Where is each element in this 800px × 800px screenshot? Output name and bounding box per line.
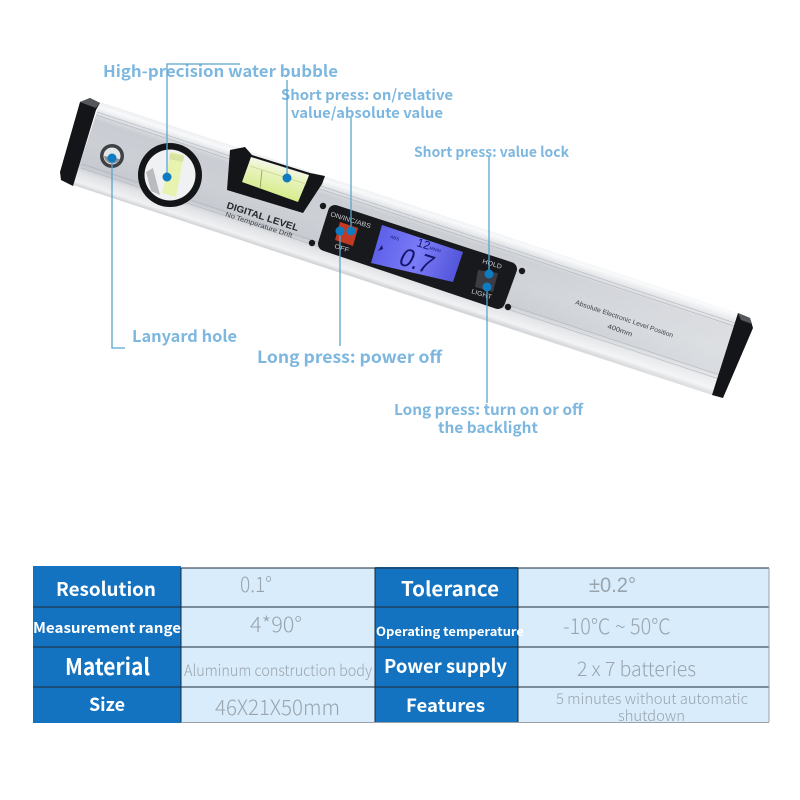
product name text: DIGITAL LEVEL <box>225 200 300 234</box>
table grid <box>33 568 769 722</box>
row: measurement range: Measurement range <box>33 617 181 638</box>
button captions: OFF <box>333 243 350 254</box>
row: resolution: Resolution <box>56 575 156 602</box>
LCD display <box>371 225 463 282</box>
LCD display: MIN/M <box>429 245 441 253</box>
body ridges <box>81 112 735 379</box>
row: features: Features <box>406 692 485 718</box>
top bubble vial housing <box>227 147 325 213</box>
label: short press on/relative: value/absolute value <box>291 102 443 123</box>
model text: Absolute Electronic Level Position <box>574 299 674 340</box>
row: operating temperature: -10℃ ~ 50℃ <box>563 611 671 641</box>
button captions <box>329 211 503 301</box>
button captions: ON/INC/ABS <box>329 211 372 230</box>
button captions: LIGHT <box>470 288 493 301</box>
panel screws <box>309 203 525 310</box>
label: short press on/relative <box>281 84 453 123</box>
label: lanyard hole: Lanyard hole <box>132 323 237 347</box>
row: size <box>89 691 340 722</box>
power button <box>335 222 358 246</box>
specification table <box>33 566 769 726</box>
callout: power off pointer <box>336 226 344 346</box>
label: value lock: Short press: value lock <box>414 142 570 162</box>
row: tolerance: Tolerance <box>401 573 499 602</box>
row: features: 5 minutes without automatic <box>556 688 748 709</box>
callout: water bubble pointer (top vial) <box>282 80 292 182</box>
left end cap <box>60 98 100 186</box>
row: material <box>65 648 372 682</box>
row: material: Aluminum construction body <box>184 659 372 681</box>
label: power off: Long press: power off <box>257 344 443 368</box>
round bubble vial window <box>138 143 202 207</box>
infographic canvas <box>33 63 770 723</box>
body sheen <box>73 102 738 395</box>
callout: water bubble pointer (round vial) <box>162 64 240 182</box>
row: size: Size <box>89 691 125 717</box>
row: measurement range: 4*90° <box>250 609 302 639</box>
label: water bubble: High-precision water bubble <box>103 58 338 82</box>
label: backlight: the backlight <box>438 417 539 438</box>
button captions: HOLD <box>481 258 503 271</box>
row: features: shutdown <box>618 705 685 726</box>
row: power supply <box>384 652 696 682</box>
product name text: No Temperature Drift <box>224 211 293 240</box>
aluminium body <box>73 102 738 395</box>
control panel <box>309 203 525 310</box>
hold and light button <box>475 270 498 292</box>
row: resolution: 0.1° <box>240 569 272 599</box>
callout: backlight pointer <box>482 282 492 403</box>
row: operating temperature: Operating temperature <box>376 621 524 640</box>
row: power supply: Power supply <box>384 652 507 679</box>
digital level tool <box>60 98 753 398</box>
row: measurement range <box>33 609 302 639</box>
LCD display: ABS <box>390 234 400 242</box>
label: backlight: Long press: turn on or off <box>394 399 584 420</box>
lanyard hole <box>100 144 124 168</box>
right end cap <box>712 313 753 398</box>
LCD display: 12 <box>415 235 432 253</box>
callout: on/relative pointer <box>346 118 356 236</box>
row: operating temperature <box>376 611 671 641</box>
label: backlight <box>394 399 584 438</box>
callout: value lock pointer <box>484 157 494 278</box>
callout: lanyard pointer <box>108 154 125 348</box>
label: short press on/relative: Short press: on/relative <box>281 84 453 105</box>
row: power supply: 2 x 7 batteries <box>577 653 696 682</box>
value cell backgrounds <box>181 568 769 723</box>
row: features <box>408 692 748 721</box>
row: tolerance: ±0.2° <box>589 574 636 597</box>
row: resolution <box>56 569 272 602</box>
row: size: 46X21X50mm <box>215 692 340 722</box>
row: material: Material <box>65 648 150 682</box>
row: tolerance <box>401 573 636 602</box>
model text: 400mm <box>606 323 633 338</box>
LCD display: 0.7 <box>394 242 440 279</box>
header cell backgrounds <box>33 566 518 723</box>
